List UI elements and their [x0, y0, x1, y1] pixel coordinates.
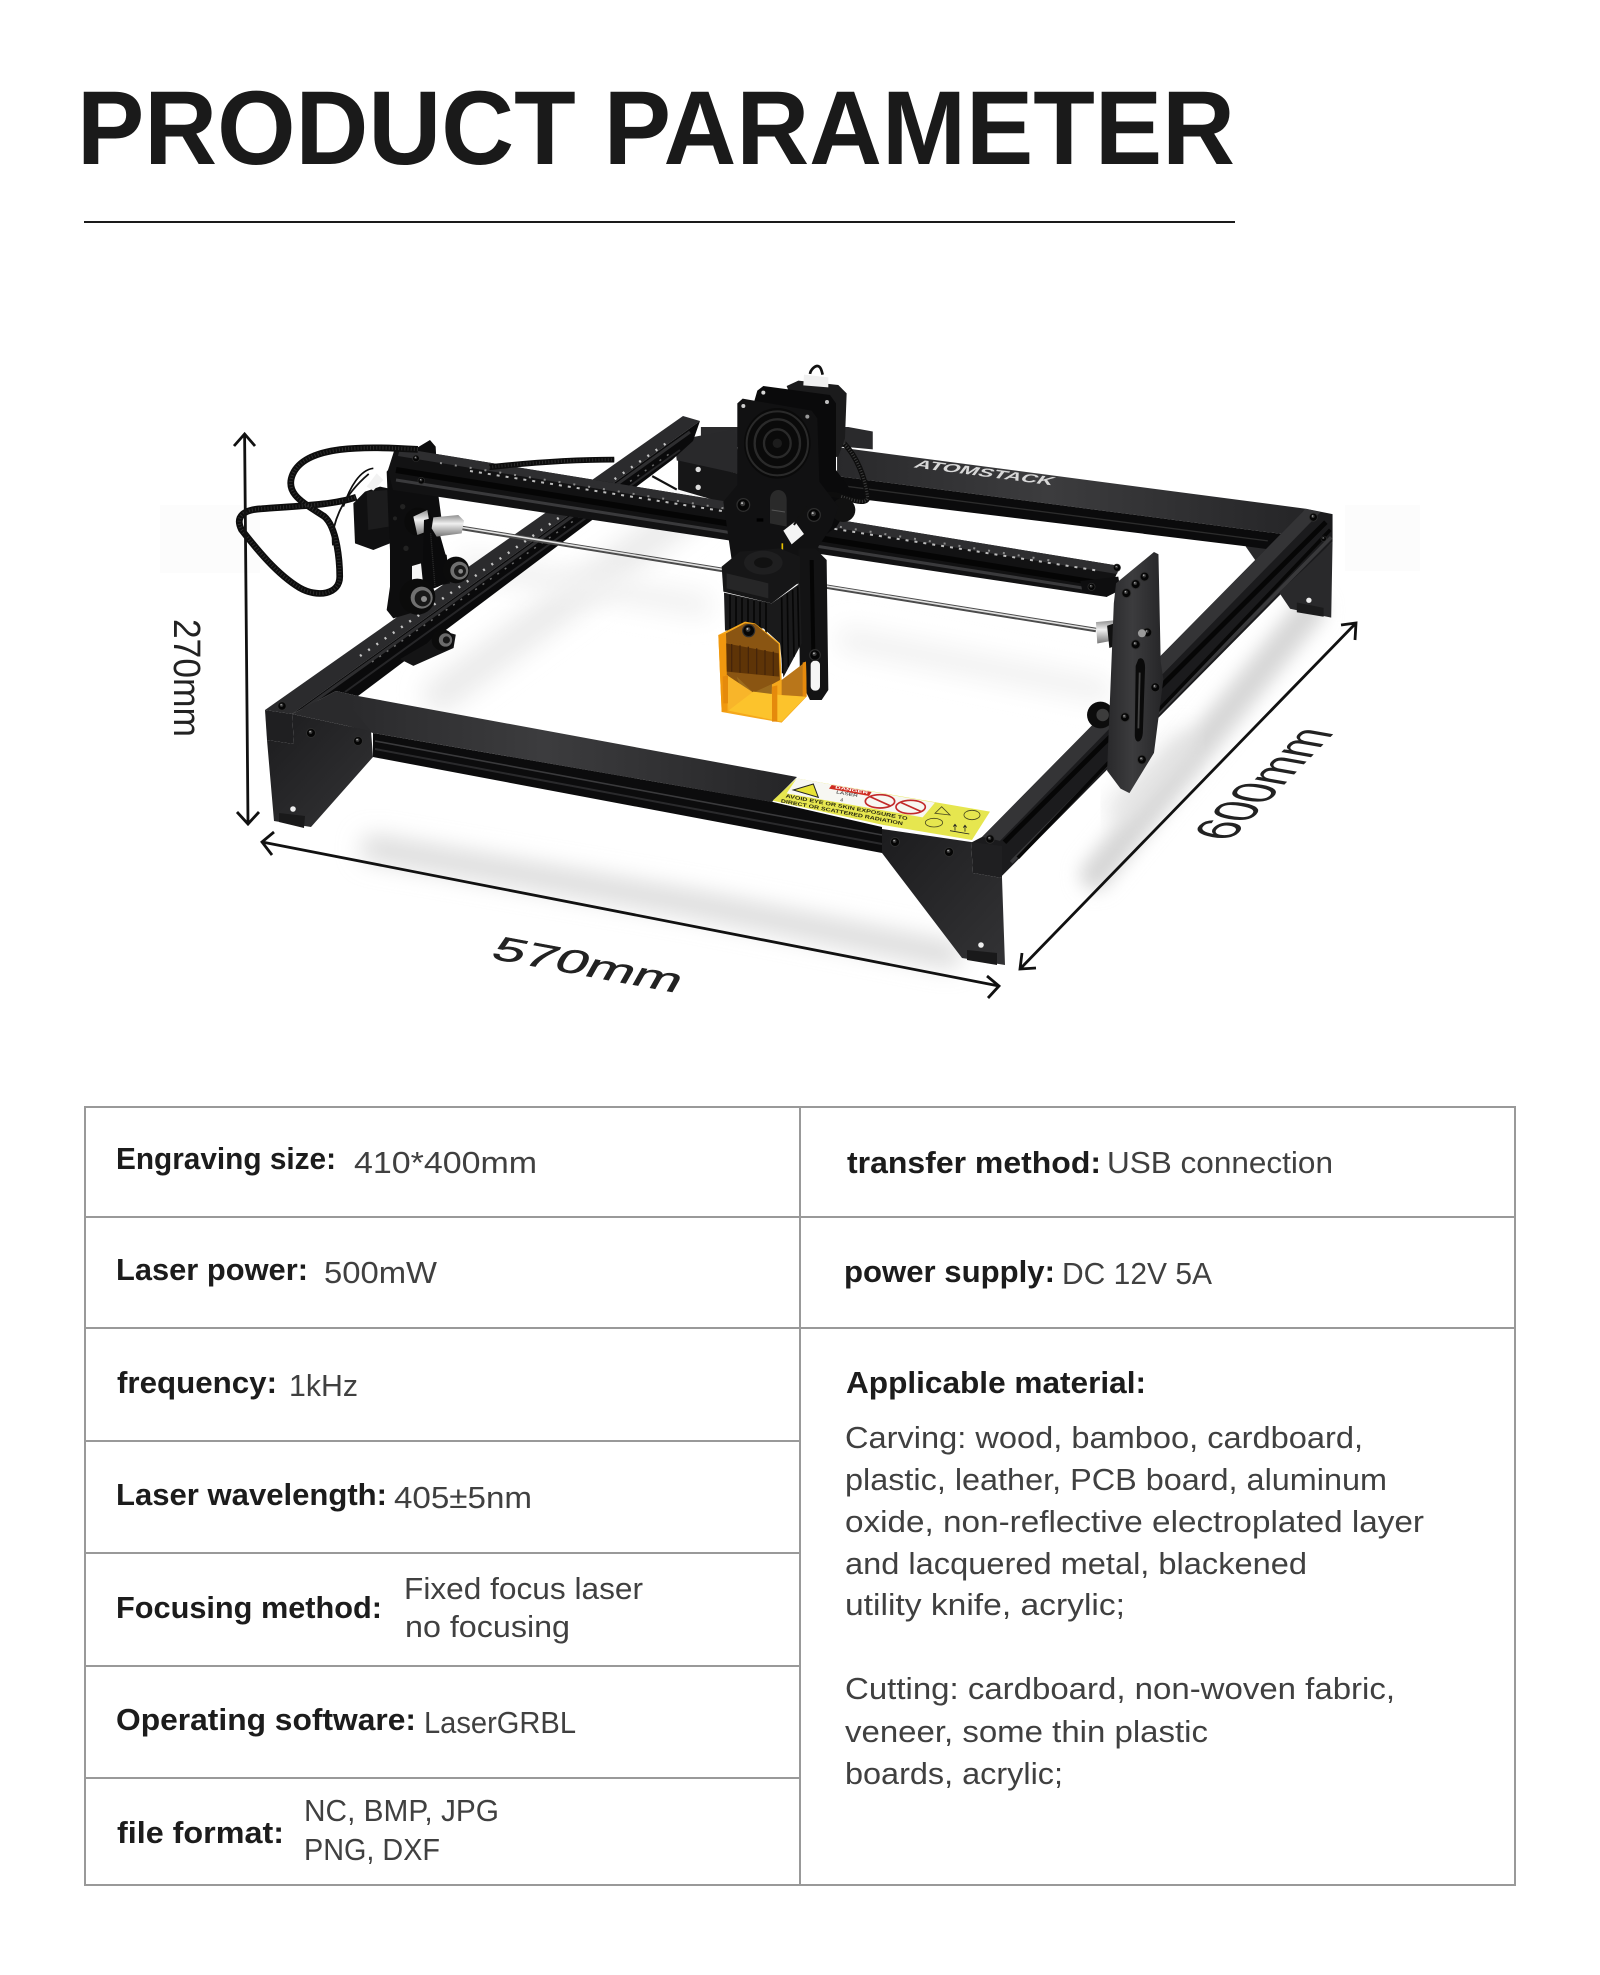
end plate [387, 440, 450, 618]
cutting materials [845, 1671, 1395, 1791]
white connector [783, 522, 804, 544]
back right leg [1279, 542, 1333, 618]
row: frequency: frequency: [117, 1365, 277, 1400]
width arrow [262, 832, 999, 998]
row: laser power: 500mW [324, 1255, 438, 1290]
rear plate [737, 386, 853, 540]
warning sticker: LASER [836, 789, 858, 798]
row: transfer method [847, 1145, 1333, 1180]
row: laser power [116, 1252, 438, 1290]
bearing and coupler [404, 508, 464, 590]
lower V-wheel under left rail [400, 629, 456, 666]
dimension: depth 600mm [1020, 623, 1356, 969]
left rail [265, 416, 700, 714]
front fan plate [723, 399, 838, 560]
front-left leg [265, 691, 373, 828]
motor on top [787, 366, 847, 460]
heading: Applicable material: [846, 1365, 1146, 1400]
carving materials: plastic, leather, PCB board, aluminum [845, 1462, 1387, 1497]
title: PRODUCT PARAMETER [77, 70, 1235, 187]
center slot [770, 490, 787, 527]
plate body [1107, 552, 1163, 793]
warning sticker: DANGER [835, 785, 869, 795]
table grid [85, 1107, 1515, 1885]
cutting materials: boards, acrylic; [845, 1756, 1063, 1791]
back-left bracket [675, 429, 739, 507]
row: laser wavelength [116, 1477, 532, 1515]
warning sticker [773, 778, 990, 840]
wheels [399, 557, 469, 615]
row: operating software [116, 1702, 576, 1740]
mounting bracket [796, 548, 828, 700]
left gantry motor and end plate [343, 440, 450, 618]
row: focusing method [116, 1571, 643, 1644]
carriage with fan plates [723, 366, 868, 560]
row: file format: NC, BMP, JPG [304, 1793, 499, 1828]
row: focusing method: Focusing method: [116, 1590, 382, 1625]
carving materials [845, 1420, 1424, 1622]
row: transfer method: USB connection [1107, 1145, 1333, 1180]
dimension: width 570mm: 570mm [485, 930, 692, 1000]
row: engraving size [116, 1141, 537, 1180]
dimension: height 270mm: 270mm [165, 619, 207, 737]
right gantry end plate [1080, 552, 1163, 793]
row: engraving size: 410*400mm [354, 1145, 537, 1180]
row: laser power: Laser power: [116, 1252, 308, 1287]
row: frequency [117, 1365, 358, 1403]
title underline [84, 221, 1235, 223]
row: laser wavelength: Laser wavelength: [116, 1477, 387, 1512]
front bar [336, 691, 882, 853]
front-right leg [882, 829, 1005, 965]
carving materials: utility knife, acrylic; [845, 1587, 1125, 1622]
row: laser wavelength: 405±5nm [394, 1480, 532, 1515]
soft floor shadows [160, 505, 1420, 955]
cutting materials: Cutting: cardboard, non-woven fabric, [845, 1671, 1395, 1706]
cooling fan housing [722, 548, 800, 603]
laser module [718, 548, 828, 723]
left gantry drive: bearing, coupler and wheels [393, 455, 469, 615]
row: power supply: power supply: [844, 1254, 1055, 1289]
warning sticker: AVOID EYE OR SKIN EXPOSURE TO [785, 793, 908, 822]
specification table [85, 1107, 1515, 1885]
row: operating software: Operating software: [116, 1702, 416, 1737]
depth arrow [1020, 623, 1356, 969]
fan grill [744, 408, 811, 479]
height arrow [234, 434, 259, 824]
brand name: ATOMSTACK [911, 457, 1060, 488]
V-wheel [1087, 702, 1114, 728]
dimension: height 270mm [165, 434, 259, 824]
rod end bearing [1096, 620, 1116, 644]
dimension: depth 600mm: 600mm [1180, 723, 1348, 844]
row: operating software: LaserGRBL [424, 1705, 576, 1740]
row: engraving size: Engraving size: [116, 1141, 336, 1176]
cable on plate [807, 443, 868, 510]
row: file format: file format: [117, 1815, 284, 1850]
row: focusing method: Fixed focus laser [404, 1571, 643, 1606]
row: power supply [844, 1254, 1212, 1291]
warning sticker: 4 [840, 797, 844, 804]
row: frequency: 1kHz [289, 1368, 358, 1403]
heat sink [724, 583, 802, 677]
row: focusing method: no focusing [405, 1609, 570, 1644]
orange acrylic shield [718, 622, 807, 723]
row: transfer method: transfer method: [847, 1145, 1101, 1180]
panel: applicable material [845, 1365, 1424, 1791]
gantry rail [388, 448, 1120, 597]
back bar with brand name [701, 427, 1306, 565]
stepper motor [343, 468, 390, 550]
row: power supply: DC 12V 5A [1062, 1256, 1212, 1291]
row: file format [117, 1793, 499, 1867]
rod [462, 528, 1096, 630]
row: file format: PNG, DXF [304, 1832, 440, 1867]
right rail [972, 509, 1333, 876]
carving materials: oxide, non-reflective electroplated layer [845, 1504, 1424, 1539]
dimension: width 570mm [262, 832, 999, 1000]
warning sticker: DIRECT OR SCATTERED RADIATION [780, 798, 904, 827]
carving materials: and lacquered metal, blackened [845, 1546, 1307, 1581]
cutting materials: veneer, some thin plastic [845, 1714, 1208, 1749]
braided cable [239, 448, 677, 593]
carving materials: Carving: wood, bamboo, cardboard, [845, 1420, 1363, 1455]
product illustration: laser engraver with dimensions [160, 366, 1420, 1000]
